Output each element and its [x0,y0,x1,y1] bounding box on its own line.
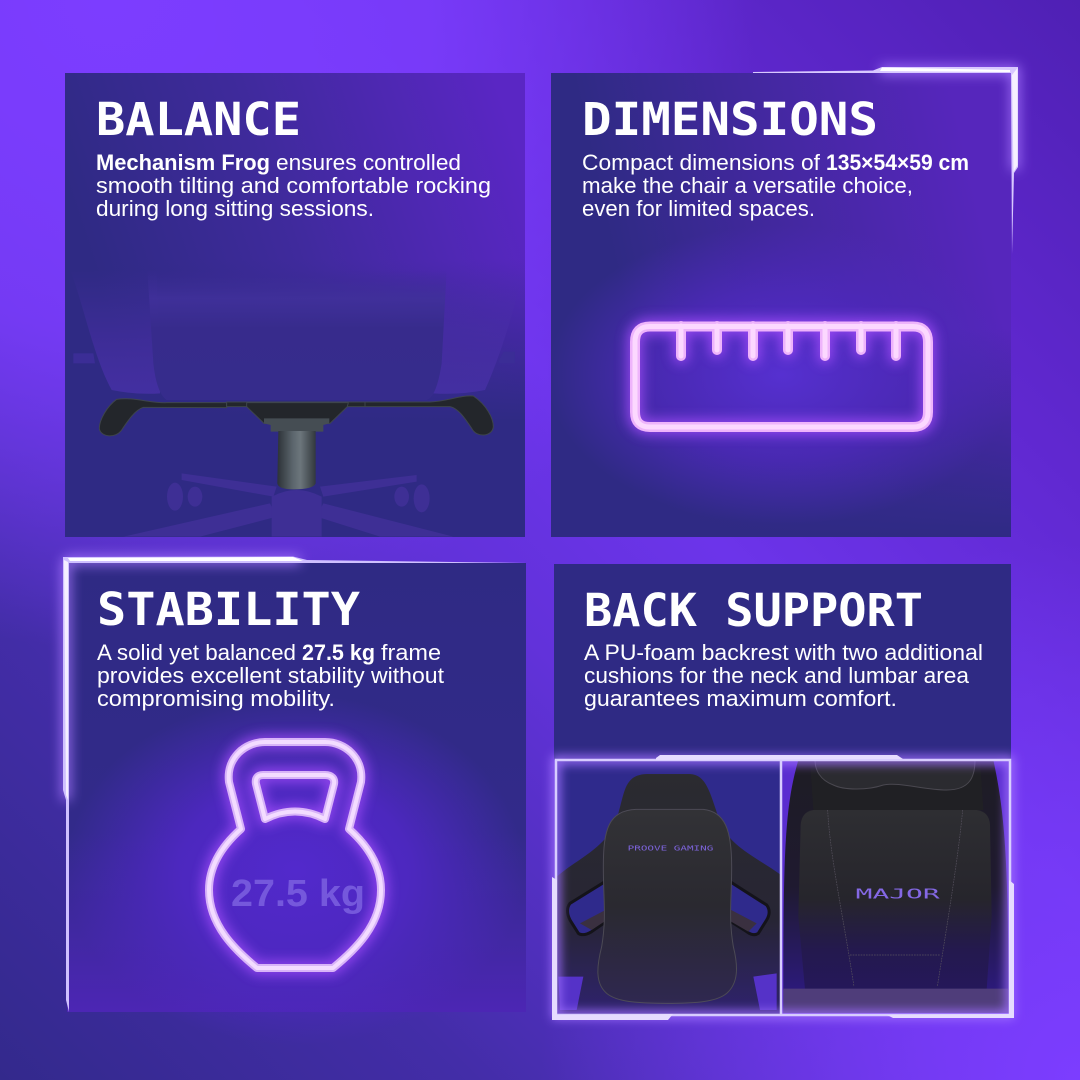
icon: neon ruler [635,326,928,427]
seat front [783,988,1008,1013]
glow frame: photos [552,755,1014,1020]
text block: back support description [584,640,983,711]
text block: stability description: compromising mobility. [97,686,335,711]
icon: neon kettlebell [209,742,381,968]
image: chair headrest view [556,760,783,1017]
armrest bases [73,353,95,363]
weight label: 27.5 kg [231,873,365,915]
text block: stability description: provides excellent stability without [97,663,445,688]
panel: dimensions [547,73,1017,537]
star base [123,473,453,537]
heading: balance: BALANCE [96,93,301,146]
glow frame: stability [63,556,526,1012]
text block: dimensions description: Compact dimensions of [582,150,821,175]
seat back [783,760,1008,990]
image: lumbar cushion view [782,760,1010,1017]
text block: balance description: ensures controlled [276,150,461,175]
lumbar cushion [798,810,992,989]
gas lift [264,418,329,432]
seat cushion [149,284,446,393]
text block: dimensions description [582,150,969,221]
panel: stability [65,563,526,1045]
text block: back support description: A PU-foam backrest with two additional [584,640,983,665]
text block: stability description: A solid yet balanced [97,640,296,665]
text block: stability description: frame [381,640,441,665]
panel: balance [65,73,525,537]
glow frame: dimensions [753,67,1018,254]
pillow logo: PROOVE GAMING [628,845,713,853]
text block: stability description: 27.5 kg [302,640,375,665]
tilt mechanism arms [99,396,493,436]
image: chair seat and tilt mechanism [74,282,500,536]
text block: balance description: Mechanism Frog [96,150,270,175]
heading: back support: BACK SUPPORT [584,584,923,637]
panel: back support [554,564,1011,1017]
lumbar logo: MAJOR [856,888,942,903]
text block: balance description: during long sitting sessions. [96,196,374,221]
heading: dimensions: DIMENSIONS [582,93,878,146]
text block: dimensions description: 135×54×59 cm [826,150,969,175]
backrest shell [557,774,783,1017]
text block: back support description: cushions for the neck and lumbar area [584,663,969,688]
heading: stability: STABILITY [97,583,360,636]
shoulder openings [567,882,608,935]
seat wings [80,300,160,394]
text block: dimensions description: make the chair a versatile choice, [582,173,913,198]
text block: balance description: smooth tilting and comfortable rocking [96,173,491,198]
text block: back support description: guarantees maximum comfort. [584,686,897,711]
text block: stability description [97,640,445,711]
neck pillow [598,809,737,1003]
text block: balance description [96,150,491,221]
text block: dimensions description: even for limited spaces. [582,196,815,221]
purple side gaps [558,977,583,1010]
neck cushion [815,760,975,790]
